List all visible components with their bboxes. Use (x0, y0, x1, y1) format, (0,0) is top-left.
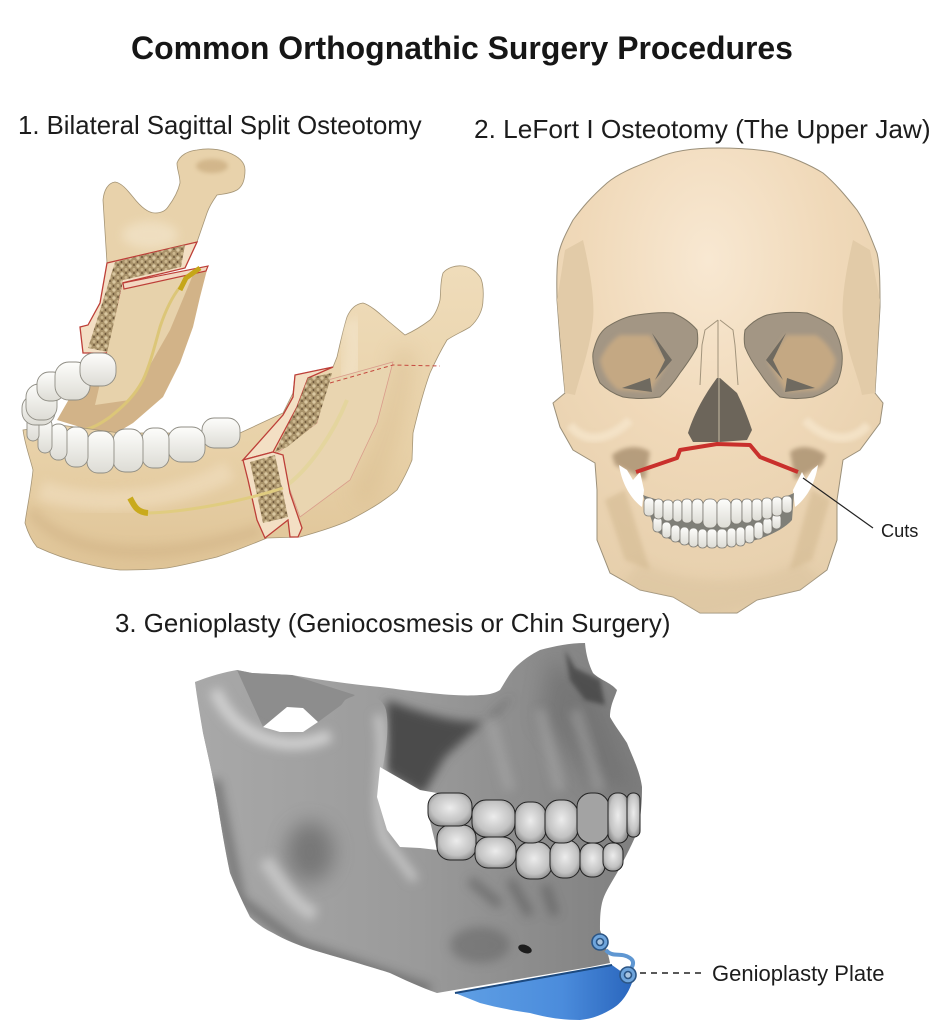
split inner surface (277, 362, 393, 517)
cuts leader line (803, 478, 873, 528)
cut surfaces (243, 367, 333, 460)
coronoid notch (263, 707, 318, 732)
eye sockets (593, 312, 842, 398)
main body of mandible (23, 266, 483, 570)
red cut line (636, 444, 798, 472)
jaw base (195, 643, 642, 993)
cut surface (80, 242, 197, 353)
ramus opening (377, 767, 437, 850)
nasal cavity (688, 378, 752, 442)
cranium (553, 148, 883, 613)
title: Common Orthognathic Surgery Procedures (131, 30, 793, 66)
mental foramen (517, 943, 533, 955)
jaw shading (195, 650, 640, 990)
illustration: mandible with sagittal split (22, 149, 483, 570)
lower teeth (22, 353, 240, 473)
screws (592, 934, 636, 983)
temple panels (557, 240, 593, 395)
leader line (640, 972, 706, 974)
split fragment with nerve (57, 266, 208, 435)
cut guide (330, 365, 440, 383)
lower teeth (437, 825, 623, 879)
nasal bones (700, 320, 738, 445)
mouth opening gaps (619, 465, 818, 507)
far ramus (57, 149, 245, 435)
label: cuts: Cuts (881, 521, 918, 541)
blue plate (455, 965, 633, 1020)
illustration: skull front view (553, 148, 918, 620)
illustration: grey jaw with genioplasty plate (195, 643, 884, 1020)
upper teeth (644, 496, 792, 528)
upper teeth (428, 793, 640, 843)
teeth backing (643, 493, 794, 547)
label: genioplasty plate: Genioplasty Plate (712, 961, 884, 986)
nerve (148, 488, 283, 513)
plate connector (606, 950, 633, 972)
heading: procedure 3: 3. Genioplasty (Geniocosmesis or Chin Surgery) (115, 610, 670, 638)
heading: procedure 2: 2. LeFort I Osteotomy (The Upper Jaw) (474, 114, 931, 144)
cheek hollows (612, 447, 826, 480)
heading: procedure 1: 1. Bilateral Sagittal Split Osteotomy (18, 112, 422, 140)
lower teeth (653, 514, 781, 548)
plate edge (455, 965, 612, 993)
